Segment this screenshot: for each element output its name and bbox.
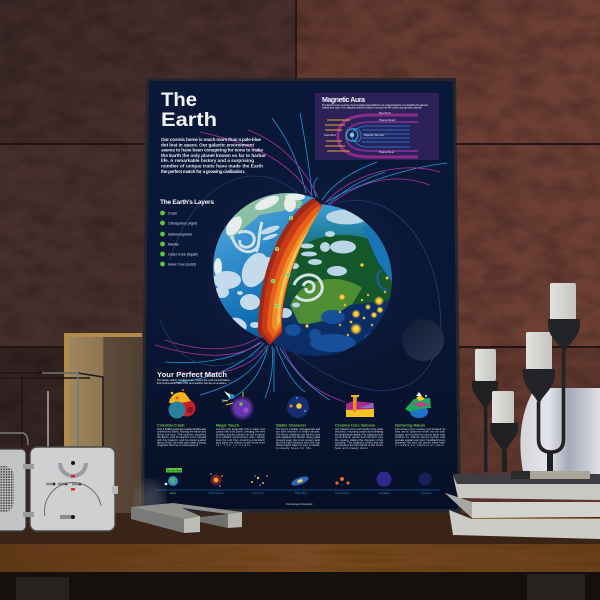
candelabra xyxy=(523,283,580,472)
layers legend: Lithosphere (rigid) xyxy=(168,221,197,225)
your perfect match heading: Your Perfect Match xyxy=(157,370,227,379)
card: creative core: Our planet's core and mantle drive plate xyxy=(335,427,384,431)
copyright line: Kurzgesagt Infographic xyxy=(286,502,313,506)
candle holders xyxy=(472,283,580,472)
card: celestial crash: Celestial Crash xyxy=(157,424,185,428)
magnetic aura panel: Plasma Sheet xyxy=(379,151,394,154)
cross-section layers xyxy=(258,198,322,345)
tag: you are here xyxy=(166,468,182,472)
card: creative core: tectonics, recycling carbon and keeping xyxy=(335,430,384,434)
intro paragraph: life. A remarkable history and a surprising xyxy=(161,158,254,163)
card: creative core xyxy=(335,424,384,450)
card: celestial crash: with the impactor, and the planet gained xyxy=(157,438,207,442)
your perfect match heading: that produced a chain of life and reaction can life composition. xyxy=(157,381,227,385)
shelf brackets xyxy=(16,574,585,600)
timeline labels: Universe xyxy=(421,491,432,495)
your perfect match heading: Temperate, writing, unhabited. Her... Here is the most unusual history xyxy=(157,378,231,382)
vase xyxy=(520,388,600,476)
magnetosphere diagram xyxy=(325,115,418,157)
radio dials xyxy=(45,461,101,519)
candle left xyxy=(472,349,498,472)
your perfect match heading xyxy=(157,370,231,385)
timeline labels: Orion Arm xyxy=(252,491,264,495)
card: nurturing nature xyxy=(395,424,446,447)
intro paragraph: number of unique traits have made the Earth xyxy=(161,164,263,168)
icon: star cluster xyxy=(251,475,268,486)
icon: creative core volcano xyxy=(346,395,374,417)
reflection on glass xyxy=(136,482,164,518)
magnetic aura panel: habitat and solar. The magnetic shield is helped to protect the life-carrier and genetic material. xyxy=(322,106,422,110)
moon xyxy=(402,319,444,361)
swirl on right hemisphere xyxy=(294,275,322,300)
card: celestial crash: Over 4.5 billion years ago a planet of Mars-size xyxy=(157,427,207,431)
magnetic aura panel: Bow Shock xyxy=(379,112,392,115)
card: magic touch: of a suitable environment. Also, Jupiter xyxy=(216,435,265,439)
magnetic field lines xyxy=(155,113,447,402)
icon: magic touch xyxy=(222,391,253,419)
card: stable character: Stable Character xyxy=(276,424,307,428)
icon: milky way xyxy=(290,475,310,487)
layers legend: Inner Core (solid) xyxy=(168,262,196,266)
layers legend: Crust xyxy=(168,211,177,215)
metal magnet object xyxy=(131,503,242,533)
card: nurturing nature: own world. Bacteria filled the air with xyxy=(395,430,446,434)
magnetic aura panel: Magnetic Aura xyxy=(322,97,365,104)
card: celestial crash: plenty of iron. Its metal core made a strong xyxy=(157,440,207,444)
card: magic touch: and gave our planet some extra time xyxy=(216,440,266,444)
card: stable character: allows liquid water to stay on Earth. xyxy=(276,443,320,447)
icon: solar system xyxy=(210,473,223,487)
title: The xyxy=(161,89,197,111)
layers legend: Outer Core (liquid) xyxy=(168,252,198,256)
card: magic touch: carbon fell onto Earth, bringing the very xyxy=(216,430,266,434)
card: celestial crash: the Earth, and the Earth's core merged xyxy=(157,435,207,439)
card: magic touch: for life to begin. xyxy=(216,443,252,447)
canvas frame leaning behind poster xyxy=(64,333,144,515)
left hemisphere xyxy=(213,193,316,338)
card: stable character: The Moon stabilizes the Earth's axis xyxy=(276,432,321,436)
earth globe xyxy=(212,192,392,360)
magnetic aura panel: Solar Wind xyxy=(324,134,336,137)
card: creative core: possible. The magnetic shield and the xyxy=(335,440,384,444)
timeline labels: Laniakea xyxy=(379,491,390,495)
timeline labels: Solar System xyxy=(208,491,224,495)
card: stable character: A steady home for life. xyxy=(276,446,312,450)
right hemisphere xyxy=(272,204,392,356)
card: celestial crash: tilting the axis. The collision liquefied xyxy=(157,432,207,436)
timeline labels: Local Group xyxy=(335,491,350,495)
card: stable character: our orbit around it is nearly circular. xyxy=(276,430,320,434)
card: magic touch: Magic Touch xyxy=(216,424,240,428)
card: nurturing nature: between life and the planet have kept xyxy=(395,440,445,444)
card: creative core: the temperature steady. The volcanoes and xyxy=(335,432,384,436)
card: nurturing nature: Nurturing Nature xyxy=(395,424,425,428)
retro radio xyxy=(0,391,118,531)
card: magic touch xyxy=(216,424,266,447)
icon: earth xyxy=(165,476,178,486)
card: nurturing nature: animals spread over land. Feedback loops xyxy=(395,438,446,442)
card: creative core: Creative Core Volcano xyxy=(335,424,376,428)
timeline labels xyxy=(170,491,432,495)
wire frame box xyxy=(0,373,103,448)
shelf xyxy=(0,513,600,600)
card: celestial crash: magnetic field as a consequence. xyxy=(157,443,199,447)
intro paragraph: dot lost in space. Our galactic environment xyxy=(161,142,254,147)
layers legend: The Earth's Layers xyxy=(160,199,214,206)
layers legend: Mantle xyxy=(168,242,179,246)
layers legend: Asthenosphere xyxy=(168,232,192,236)
city lights xyxy=(305,263,389,336)
timeline labels: Earth xyxy=(170,491,177,495)
card: creative core: the oceans, making the chemistry of life xyxy=(335,438,384,442)
tag: you are here: You Are Here xyxy=(166,468,182,472)
card: creative core: atmosphere formed thanks to the core's xyxy=(335,443,384,447)
card: magic touch: kept the rest from crashing onto Earth xyxy=(216,438,266,442)
intro paragraph xyxy=(161,137,266,174)
icon: stable character xyxy=(287,396,309,418)
magnetic aura panel xyxy=(315,93,439,160)
card: nurturing nature: Life arose in the oceans and shaped its xyxy=(395,427,446,431)
card: magic touch: building blocks needed for the creation xyxy=(216,432,266,436)
icon: universe xyxy=(418,472,432,486)
icon: nurturing nature xyxy=(405,392,431,418)
title xyxy=(161,89,217,131)
icon: local group xyxy=(335,477,350,485)
card: stable character: planets keep the inner system safe xyxy=(276,438,321,442)
card: nurturing nature: oxygen and formed an ozone layer that xyxy=(395,432,445,436)
layers legend xyxy=(160,199,214,266)
framed poster xyxy=(136,78,461,518)
magnetic aura panel: The Earth's core is moving, the iron nickel responsible for our magnetosphere. It is shielding the planet's xyxy=(322,103,429,107)
card: magic touch: Comets and asteroids rich in water and xyxy=(216,427,266,431)
intro paragraph: the Earth the only planet known so far to harbor xyxy=(161,153,266,158)
magnetic aura panel: Magnetic Tail Lines xyxy=(364,134,385,137)
stacked books xyxy=(445,471,600,539)
card: nurturing nature: shields us. Plants stored carbon and xyxy=(395,435,446,439)
timeline xyxy=(155,468,440,495)
magnetic aura panel: Plasma Sheath xyxy=(379,119,396,122)
timeline labels: Milky Way xyxy=(295,491,308,495)
card: stable character: and the right distance from the Sun xyxy=(276,440,321,444)
card: stable character: The Sun is a stable, mid-aged star and xyxy=(276,427,321,431)
intro paragraph: seems to have been conspiring for eons to make xyxy=(161,148,263,153)
card: celestial crash: crashed into Earth, forming the Moon and xyxy=(157,430,207,434)
card: stable character xyxy=(276,424,321,450)
title: Earth xyxy=(161,109,217,131)
card: nurturing nature: it livable for billions of years. xyxy=(395,443,445,447)
icon: supercluster xyxy=(376,472,392,486)
card: creative core: heat and steady churn. xyxy=(335,446,369,450)
candle short xyxy=(490,391,518,472)
card: creative core: vents deliver gases and nutrients into xyxy=(335,435,384,439)
card: celestial crash xyxy=(157,424,207,447)
intro paragraph: Our cosmic home is much more than a pale-blue xyxy=(161,137,261,142)
icon: celestial crash xyxy=(168,389,196,418)
intro paragraph: the perfect match for a growing civilization. xyxy=(161,169,245,174)
card: stable character: and regulates the climate. Heavy giant xyxy=(276,435,320,439)
